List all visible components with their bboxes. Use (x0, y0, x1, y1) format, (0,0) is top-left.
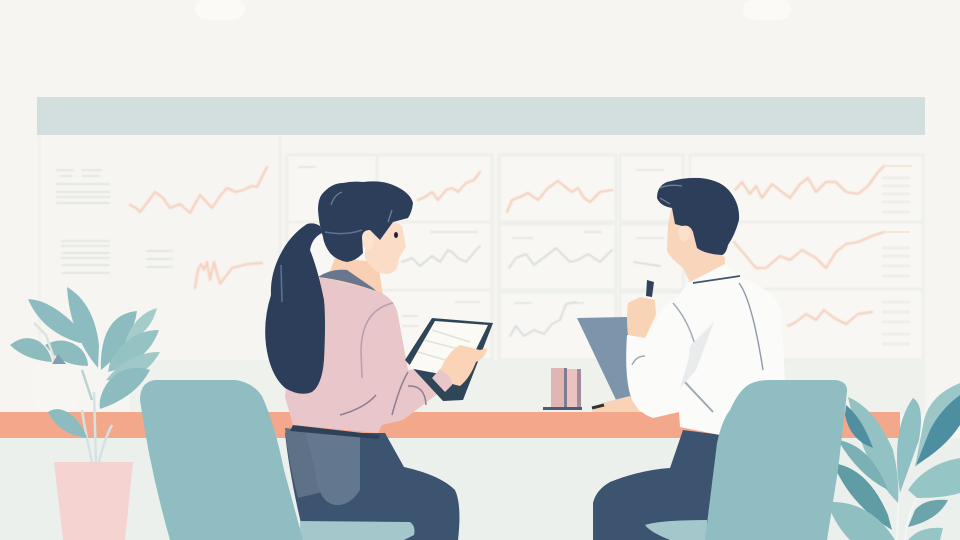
chair armrest (300, 521, 414, 540)
man's resting hand (592, 396, 640, 412)
man trousers (593, 430, 722, 540)
collar line (693, 276, 740, 283)
grey trend lines (402, 246, 660, 336)
ponytail (265, 223, 325, 394)
small white pot with plant (10, 323, 88, 412)
woman figure (265, 181, 459, 540)
white shirt (626, 264, 785, 435)
chair back (140, 380, 303, 540)
desk items: pink cylinders (543, 368, 582, 410)
man hair (657, 178, 739, 255)
salmon trend lines (130, 166, 884, 326)
man hand with phone (627, 297, 656, 338)
right side data columns (882, 178, 910, 344)
woman trousers (285, 433, 459, 540)
dashboard wall (37, 137, 925, 360)
waist belt (290, 425, 380, 439)
panel grid (280, 137, 923, 360)
ceiling lights (195, 0, 791, 20)
ear (362, 230, 374, 250)
man figure (593, 178, 785, 540)
pink planter (54, 462, 133, 540)
chair armrest (645, 520, 707, 540)
shirt seams (632, 283, 763, 412)
plant stems (82, 370, 112, 462)
right chair (645, 380, 847, 540)
tablet (405, 318, 493, 401)
hair (318, 181, 413, 262)
left floor plant (28, 287, 160, 540)
pink jacket (285, 277, 452, 433)
small table rows on panels (56, 167, 664, 326)
blue folder (577, 317, 632, 402)
face (365, 218, 406, 274)
plant leaves (28, 287, 160, 438)
man neck and face (667, 205, 725, 282)
outer leaves (848, 397, 898, 503)
header band above board (37, 97, 925, 135)
trouser pocket shading (285, 428, 330, 498)
woman's hand and cuff (432, 345, 487, 392)
right foreground plant (827, 383, 960, 540)
counter (0, 412, 900, 438)
woman neck (325, 258, 383, 295)
jacket seams (340, 303, 426, 415)
chair back (705, 380, 847, 540)
left chair (140, 380, 414, 540)
eye (394, 232, 398, 238)
plant stems (897, 480, 918, 540)
man ear (678, 225, 690, 241)
grey collar (318, 270, 376, 291)
